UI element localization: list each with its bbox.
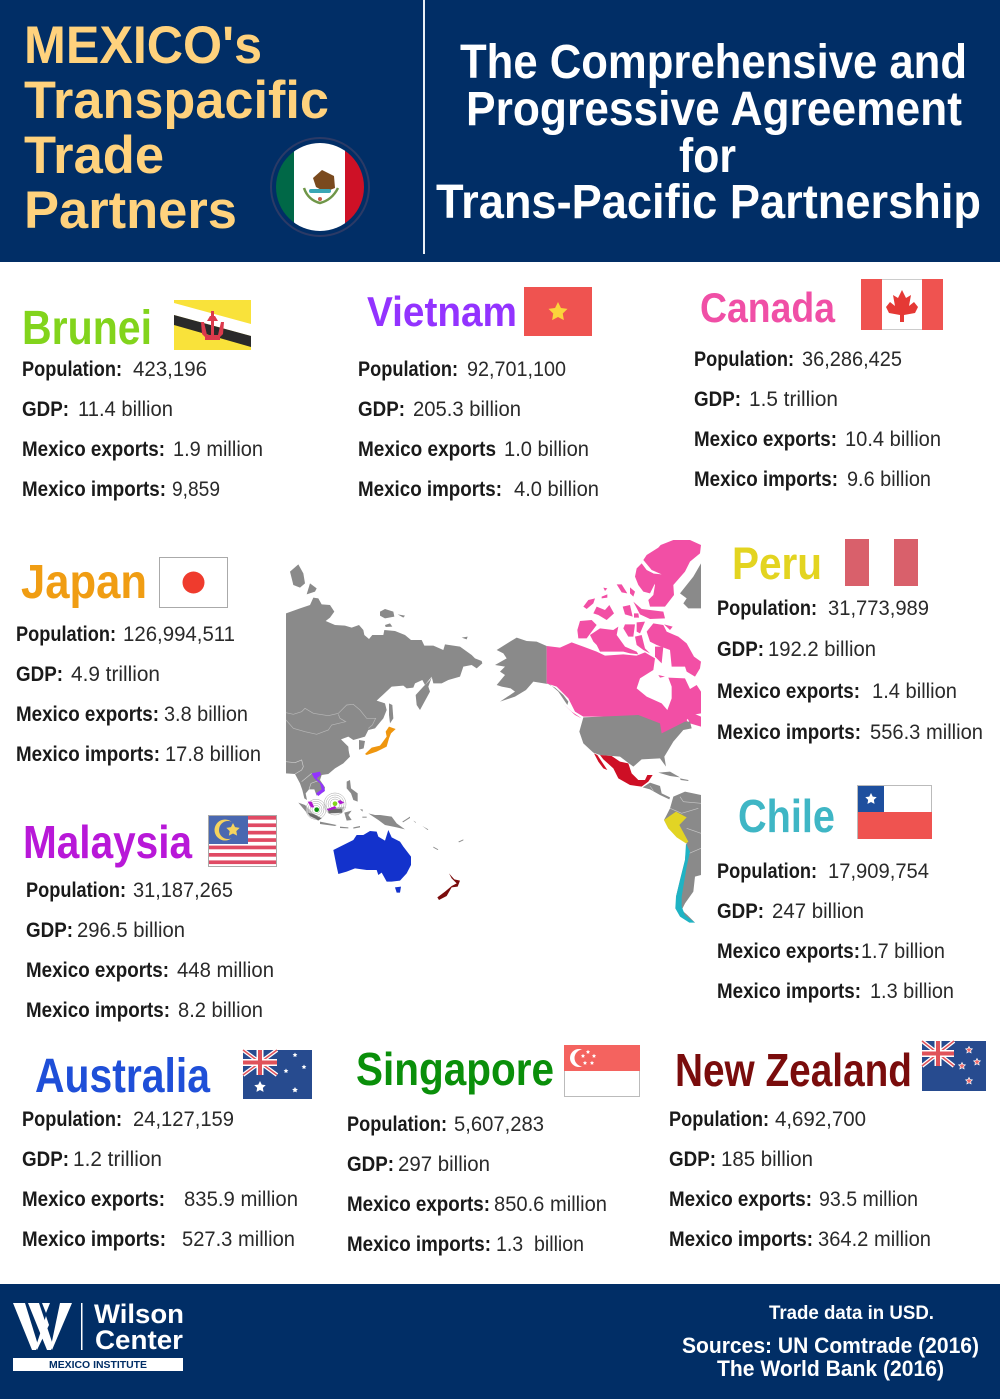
title: Mexico's Transpacific Trade Partners: Trade (24, 126, 164, 185)
stats: Canada (694, 348, 941, 491)
stats: Chile: 1.3 billion (870, 980, 954, 1003)
stats: Japan: 3.8 billion (164, 703, 248, 726)
stats: Brunei: Mexico exports: (22, 438, 165, 461)
stats: Peru: 31,773,989 (828, 597, 929, 620)
heading: Peru: Peru (732, 538, 822, 589)
stats: Canada: 10.4 billion (845, 428, 941, 451)
land: Australia (333, 830, 411, 893)
heading: Vietnam: Vietnam (367, 288, 517, 335)
stats: Malaysia: 448 million (177, 959, 274, 982)
stats: Canada: Mexico exports: (694, 428, 837, 451)
stats: Singapore: 850.6 million (494, 1193, 607, 1216)
stats: Singapore: 5,607,283 (454, 1113, 544, 1136)
stats: Japan: 126,994,511 (123, 623, 235, 646)
stats: Japan: 4.9 trillion (71, 663, 160, 686)
land: Canada (547, 540, 701, 734)
stats: Malaysia: Mexico exports: (26, 959, 169, 982)
panel: Singapore (347, 1043, 640, 1256)
panel: New Zealand (669, 1041, 986, 1251)
stats: Vietnam: GDP: (358, 398, 405, 421)
heading: Singapore: Singapore (356, 1043, 554, 1095)
stats: Singapore: Population: (347, 1113, 447, 1136)
icon: Brunei flag (174, 300, 251, 350)
map: Pacific-centred world map (286, 540, 701, 923)
stats: Chile: 247 billion (772, 900, 864, 923)
stats: New Zealand: Mexico exports: (669, 1188, 812, 1211)
panel: Brunei (22, 300, 263, 501)
icon: New Zealand flag (922, 1041, 986, 1091)
title: Mexico's Transpacific Trade Partners (24, 16, 329, 240)
logo: Wilson Center Mexico Institute: MEXICO INSTITUTE (49, 1359, 147, 1371)
map section: northeast Asia (286, 564, 482, 755)
stats: Japan (16, 623, 261, 766)
callout: Singapore and Brunei rings (306, 793, 346, 820)
header banner (0, 0, 1000, 262)
title: CPTPP agreement name: Trans-Pacific Partnership (436, 176, 981, 229)
heading: Brunei: Brunei (22, 302, 152, 355)
stats: Peru: 1.4 billion (872, 680, 957, 703)
land: New Zealand (437, 873, 460, 900)
stats: Chile: 17,909,754 (828, 860, 929, 883)
heading: Malaysia: Malaysia (23, 816, 192, 868)
stats: Chile: GDP: (717, 900, 764, 923)
logo: Wilson Center Mexico Institute (13, 1299, 184, 1371)
stats: Australia: 24,127,159 (133, 1108, 234, 1131)
stats: Vietnam: Mexico exports (358, 438, 496, 461)
icon: Chile flag (858, 786, 932, 839)
stats: Japan: Population: (16, 623, 116, 646)
stats: Japan: Mexico imports: (16, 743, 160, 766)
stats: Chile: Mexico exports: (717, 940, 860, 963)
land: Mexico (594, 753, 653, 787)
icon: Canada flag (861, 279, 943, 330)
stats: Malaysia: 296.5 billion (77, 919, 185, 942)
stats: Singapore (347, 1113, 607, 1256)
stats: Vietnam: Population: (358, 358, 458, 381)
stats: Canada: Population: (694, 348, 794, 371)
stats: New Zealand: Mexico imports: (669, 1228, 813, 1251)
stats: Chile: Mexico imports: (717, 980, 861, 1003)
stats: Brunei: 9,859 (172, 478, 220, 501)
stats: New Zealand: 364.2 million (818, 1228, 931, 1251)
title: CPTPP agreement name (436, 36, 981, 229)
panel: Chile (717, 786, 954, 1003)
stats: Singapore: GDP: (347, 1153, 394, 1176)
icon: Singapore flag (564, 1045, 640, 1096)
stats: Peru: GDP: (717, 638, 764, 661)
text: data sources: Sources: UN Comtrade (2016) (682, 1333, 979, 1358)
panel: Peru (717, 538, 983, 744)
stats: Australia: 835.9 million (184, 1188, 298, 1211)
logo: Wilson Center Mexico Institute: Center (95, 1325, 183, 1355)
icon: Peru flag (845, 539, 918, 586)
stats: Canada: GDP: (694, 388, 741, 411)
stats: Australia: Mexico exports: (22, 1188, 165, 1211)
icon: Australia flag (243, 1050, 312, 1099)
land: Japan (365, 727, 396, 755)
stats: Malaysia: Mexico imports: (26, 999, 170, 1022)
stats: Vietnam: 4.0 billion (514, 478, 599, 501)
stats: Singapore: Mexico exports: (347, 1193, 490, 1216)
stats: Australia: GDP: (22, 1148, 69, 1171)
stats: New Zealand: 93.5 million (819, 1188, 918, 1211)
stats: Malaysia (26, 879, 274, 1022)
land: Chile (675, 843, 695, 923)
icon: Mexico flag badge (271, 138, 369, 236)
stats: Singapore: 1.3 billion (496, 1233, 584, 1256)
stats: Vietnam: 205.3 billion (413, 398, 521, 421)
stats: Vietnam: 92,701,100 (467, 358, 566, 381)
heading: Australia: Australia (35, 1050, 210, 1103)
icon: Malaysia flag (208, 816, 276, 866)
stats: Malaysia: 8.2 billion (178, 999, 263, 1022)
stats: Malaysia: GDP: (26, 919, 73, 942)
stats: New Zealand: GDP: (669, 1148, 716, 1171)
panel: Japan (16, 556, 261, 766)
stats: Vietnam: 1.0 billion (504, 438, 589, 461)
stats: Australia: 1.2 trillion (73, 1148, 162, 1171)
stats: Vietnam (358, 358, 599, 501)
footer banner (0, 1284, 1000, 1399)
stats: Singapore: Mexico imports: (347, 1233, 491, 1256)
land: Peru (664, 812, 688, 843)
stats: Australia: Mexico imports: (22, 1228, 166, 1251)
stats: Singapore: 297 billion (398, 1153, 490, 1176)
map section: Americas south (579, 715, 701, 923)
stats: Australia: 527.3 million (182, 1228, 295, 1251)
stats: New Zealand (669, 1108, 931, 1251)
heading: Japan: Japan (21, 556, 147, 609)
stats: New Zealand: Population: (669, 1108, 769, 1131)
stats: Chile (717, 860, 954, 1003)
title: CPTPP agreement name: for (679, 130, 736, 183)
stats: Brunei: GDP: (22, 398, 69, 421)
stats: Chile: Population: (717, 860, 817, 883)
stats: Peru: Population: (717, 597, 817, 620)
stats: New Zealand: 4,692,700 (775, 1108, 866, 1131)
title: CPTPP agreement name: Progressive Agreement (466, 83, 962, 136)
map section: North America north (495, 540, 701, 734)
stats: Brunei: Mexico imports: (22, 478, 166, 501)
panel: Vietnam (358, 287, 599, 501)
icon: Japan flag (160, 558, 228, 608)
title: Mexico's Transpacific Trade Partners: MEXICO's (24, 16, 262, 75)
stats: New Zealand: 185 billion (721, 1148, 813, 1171)
panel: Australia (22, 1050, 312, 1251)
stats: Peru (717, 597, 983, 744)
icon: Vietnam flag (524, 287, 592, 336)
stats: Vietnam: Mexico imports: (358, 478, 502, 501)
stats: Malaysia: Population: (26, 879, 126, 902)
stats: Peru: 192.2 billion (768, 638, 876, 661)
logo: Wilson Center Mexico Institute: Wilson (94, 1299, 184, 1329)
stats: Japan: 17.8 billion (165, 743, 261, 766)
land: Alaska and Greenland (495, 563, 701, 705)
text: data sources: The World Bank (2016) (717, 1356, 944, 1381)
land: Vietnam (312, 772, 325, 796)
land: United States, Central and South America (579, 715, 701, 923)
title: Mexico's Transpacific Trade Partners: Transpacific (24, 71, 329, 130)
stats: Japan: Mexico exports: (16, 703, 159, 726)
text: data sources: Trade data in USD. (769, 1303, 934, 1324)
stats: Brunei: 423,196 (133, 358, 207, 381)
stats: Australia: Population: (22, 1108, 122, 1131)
stats: Brunei (22, 358, 263, 501)
stats: Canada: Mexico imports: (694, 468, 838, 491)
text: data sources (682, 1303, 979, 1381)
heading: Canada: Canada (700, 284, 836, 331)
stats: Peru: 556.3 million (870, 721, 983, 744)
heading: Chile: Chile (738, 790, 835, 842)
panel: Malaysia (23, 816, 276, 1022)
stats: Peru: Mexico exports: (717, 680, 860, 703)
heading: New Zealand: New Zealand (675, 1044, 912, 1096)
stats: Brunei: 1.9 million (173, 438, 263, 461)
stats: Peru: Mexico imports: (717, 721, 861, 744)
stats: Japan: GDP: (16, 663, 63, 686)
stats: Brunei: Population: (22, 358, 122, 381)
stats: Brunei: 11.4 billion (78, 398, 173, 421)
stats: Australia (22, 1108, 298, 1251)
stats: Canada: 9.6 billion (847, 468, 931, 491)
title: Mexico's Transpacific Trade Partners: Partners (24, 181, 237, 240)
stats: Chile: 1.7 billion (861, 940, 945, 963)
map section: Southeast Asia and Oceania (286, 750, 463, 900)
stats: Malaysia: 31,187,265 (133, 879, 233, 902)
stats: Canada: 1.5 trillion (749, 388, 838, 411)
panel: Canada (694, 279, 943, 491)
stats: Canada: 36,286,425 (802, 348, 902, 371)
